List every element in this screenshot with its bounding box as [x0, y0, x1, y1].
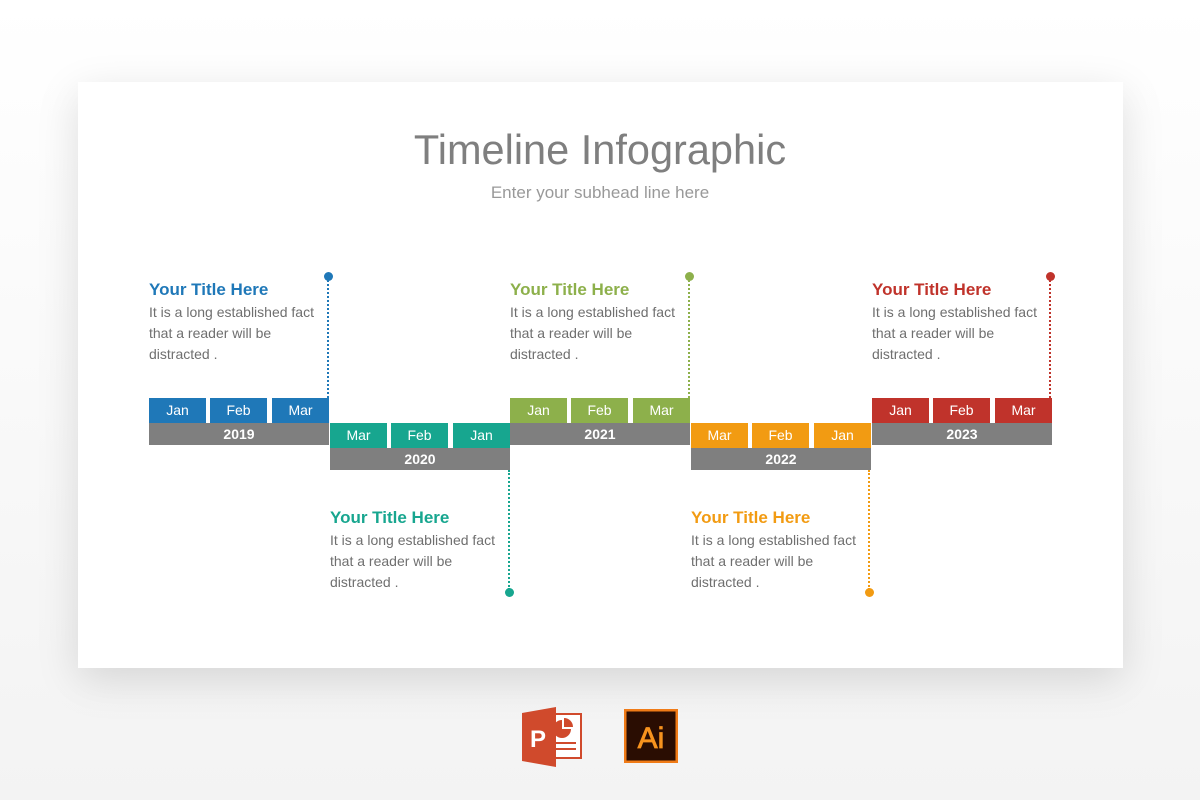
text: 2022: Your Title Here [691, 508, 810, 527]
months 2023: Jan [889, 402, 912, 418]
months 2022: Jan [831, 427, 854, 443]
year 2022: 2022 [765, 451, 797, 467]
dot 2021 [685, 272, 694, 281]
months 2021 [510, 398, 690, 423]
months 2019: Jan [166, 402, 189, 418]
months 2023 [872, 398, 1052, 423]
dot 2022 [865, 588, 874, 597]
months 2023: Feb [949, 402, 974, 418]
months 2023: Mar [1011, 402, 1036, 418]
icon: powerpoint [522, 707, 582, 767]
text: 2022: It is a long established fact that a reader will be distracted . [691, 532, 856, 590]
connector 2021 [688, 280, 690, 398]
subtitle: Enter your subhead line here [491, 183, 709, 202]
text: 2020: Your Title Here [330, 508, 449, 527]
block: 2022 [691, 423, 874, 597]
block: 2019 [149, 272, 333, 445]
months 2021: Feb [587, 402, 612, 418]
year 2019: 2019 [223, 426, 255, 442]
icon: illustrator: Ai [638, 722, 664, 755]
text: 2021: Your Title Here [510, 280, 629, 299]
year 2019 [149, 423, 329, 445]
text: 2021: It is a long established fact that a reader will be distracted . [510, 304, 675, 362]
connector 2023 [1049, 280, 1051, 398]
dot 2020 [505, 588, 514, 597]
year 2020: 2020 [404, 451, 436, 467]
months 2019: Feb [226, 402, 251, 418]
months 2019 [149, 398, 329, 423]
text: 2019: It is a long established fact that a reader will be distracted . [149, 304, 314, 362]
months 2022 [691, 423, 871, 448]
year 2020 [330, 448, 510, 470]
months 2020: Jan [470, 427, 493, 443]
icon: illustrator [624, 709, 678, 763]
icon: powerpoint: P [530, 726, 546, 753]
card panel [78, 82, 1123, 668]
months 2020: Mar [346, 427, 371, 443]
year 2021: 2021 [584, 426, 616, 442]
title: Timeline Infographic [414, 126, 786, 173]
months 2021: Mar [649, 402, 674, 418]
dot 2019 [324, 272, 333, 281]
months 2021: Jan [527, 402, 550, 418]
text: 2019: Your Title Here [149, 280, 268, 299]
text: 2023: It is a long established fact that a reader will be distracted . [872, 304, 1037, 362]
connector 2022 [868, 470, 870, 590]
connector 2020 [508, 470, 510, 590]
year 2023: 2023 [946, 426, 978, 442]
year 2023 [872, 423, 1052, 445]
year 2021 [510, 423, 690, 445]
dot 2023 [1046, 272, 1055, 281]
year 2022 [691, 448, 871, 470]
text: 2023: Your Title Here [872, 280, 991, 299]
block: 2021 [510, 272, 694, 445]
block: 2023 [872, 272, 1055, 445]
months 2022: Feb [768, 427, 793, 443]
connector 2019 [327, 280, 329, 398]
text: 2020: It is a long established fact that a reader will be distracted . [330, 532, 495, 590]
months 2020: Feb [407, 427, 432, 443]
months 2022: Mar [707, 427, 732, 443]
months 2020 [330, 423, 510, 448]
months 2019: Mar [288, 402, 313, 418]
block: 2020 [330, 423, 514, 597]
